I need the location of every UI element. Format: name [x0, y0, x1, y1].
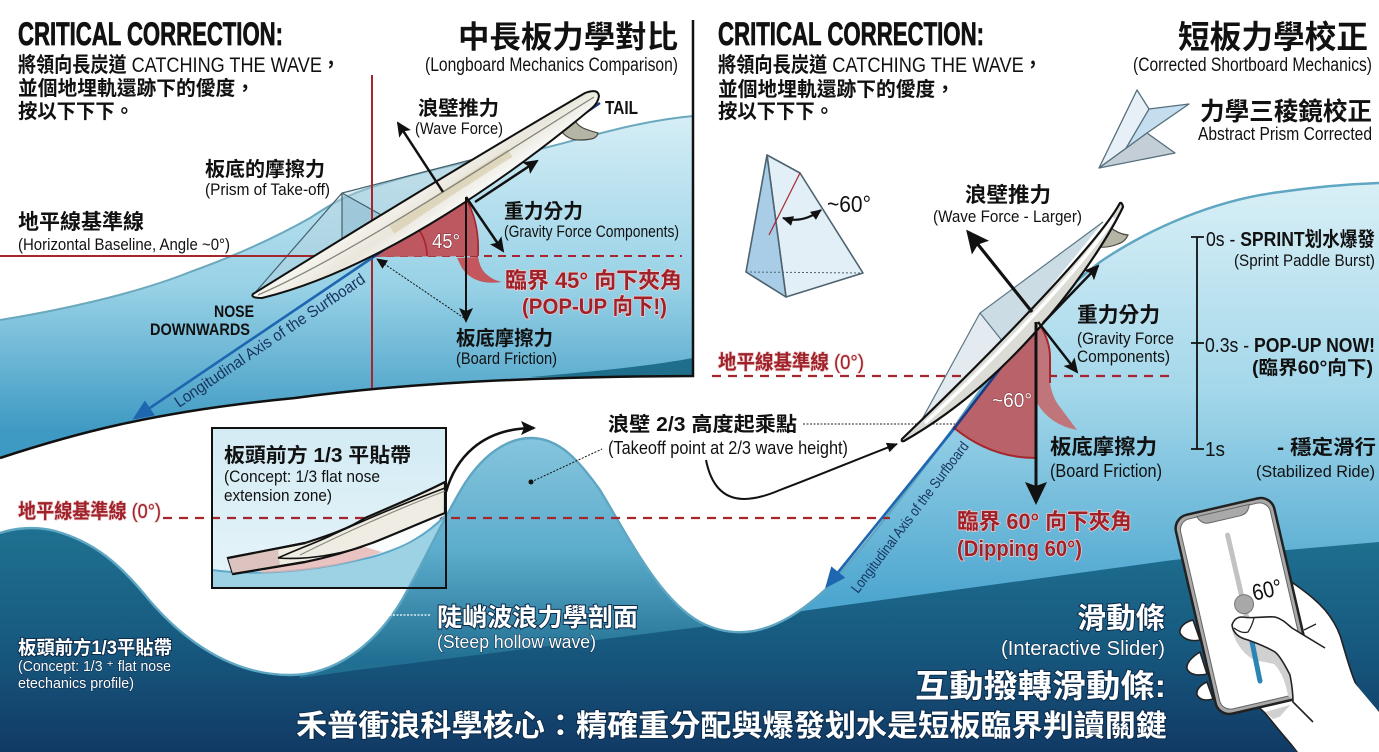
gravity label: 重力分力 — [1077, 304, 1160, 327]
critical angle callout — [505, 268, 682, 319]
takeoff label: (Takeoff point at 2/3 wave height) — [608, 438, 848, 458]
45 degree wedge — [372, 197, 502, 283]
panel: full wave profile — [0, 180, 1379, 752]
gravity label: 重力分力 — [504, 200, 583, 223]
chinese title: 短板力學校正 — [1178, 19, 1368, 55]
arrow: board friction — [465, 197, 467, 321]
1s entry: - 穩定滑行 — [1277, 435, 1376, 459]
lower left note: 板頭前方1/3平貼帶 — [18, 636, 172, 659]
baseline label: 地平線基準線 (0°) — [718, 351, 864, 374]
wave surface line — [0, 116, 693, 320]
prism label: (Prism of Take-off) — [205, 180, 330, 199]
deep water foreground — [0, 529, 1379, 752]
board friction label: (Board Friction) — [456, 349, 557, 368]
0.3s entry: (臨界60°向下) — [1252, 357, 1373, 379]
dashed baseline — [372, 255, 682, 257]
horizontal baseline label — [18, 211, 230, 254]
middle wave — [300, 439, 706, 678]
wave profile outline — [0, 183, 1379, 675]
1s entry — [1205, 435, 1376, 481]
longitudinal axis arrow — [135, 103, 600, 418]
board friction label — [1050, 435, 1162, 481]
icon: phone — [1173, 495, 1317, 717]
inset surfboard — [228, 482, 445, 574]
panel: longboard mechanics — [0, 20, 693, 458]
shortboard prism — [920, 222, 1103, 423]
panel: shortboard mechanics — [712, 203, 1170, 586]
timeline axis — [1191, 237, 1204, 449]
icon: shadow under thumb — [1232, 630, 1297, 719]
arrow: wave force — [398, 123, 443, 192]
board friction label — [456, 326, 557, 368]
slider track — [1228, 535, 1252, 641]
wave force label — [933, 184, 1082, 226]
take-off prism — [253, 157, 482, 295]
shortboard — [902, 203, 1123, 441]
critical angle callout: 臨界 45° 向下夾角 — [505, 268, 682, 293]
arrow: curved from inset to crest — [446, 428, 534, 492]
axis label: Longitudinal Axis of the Surfboard — [848, 439, 973, 596]
fin — [1100, 227, 1128, 247]
prism label: 板底的摩擦力 — [205, 157, 325, 181]
arrow: along board — [1043, 266, 1098, 323]
60 degree value: ~60° — [992, 390, 1032, 412]
inset panel background — [212, 428, 446, 588]
slider label: 滑動條 — [1077, 602, 1165, 635]
slider knob — [1233, 593, 1255, 616]
critical correction title: CRITICAL CORRECTION: — [18, 16, 283, 52]
prism label — [205, 157, 330, 199]
labels: shortboard — [718, 184, 1174, 596]
heading block: right correction — [718, 16, 1042, 123]
longboard wave water — [0, 116, 693, 458]
nose label: NOSE — [214, 302, 254, 321]
1s entry: 1s — [1205, 439, 1225, 461]
wave force label: (Wave Force) — [415, 119, 503, 138]
arrow: gravity component — [466, 197, 503, 251]
deep water corner — [530, 358, 693, 377]
prism legend: 力學三稜鏡校正 — [1200, 98, 1372, 126]
inset border — [212, 428, 446, 588]
60 degree label: ~60° — [827, 191, 871, 217]
note line 3: 按以下下下。 — [18, 100, 134, 123]
right wave — [800, 184, 1379, 612]
board friction label: 板底摩擦力 — [456, 326, 553, 350]
1s entry: (Stabilized Ride) — [1256, 462, 1375, 481]
interactive slider heading: 互動撥轉滑動條: — [915, 668, 1166, 704]
gravity label — [1077, 304, 1174, 366]
chinese title: 中長板力學對比 — [458, 20, 678, 55]
inset water curve — [212, 515, 446, 573]
note line 2: 並個地埋軌還跡下的僾度， — [18, 77, 255, 100]
takeoff label: 浪壁 2/3 高度起乘點 — [608, 412, 797, 436]
heading block: left correction — [18, 16, 340, 123]
tail label: TAIL — [605, 98, 638, 118]
steep wave label: 陡峭波浪力學剖面 — [437, 604, 638, 632]
slider value label: 60° — [1249, 574, 1284, 606]
english subtitle: (Longboard Mechanics Comparison) — [425, 55, 678, 76]
horizontal baseline label: (Horizontal Baseline, Angle ~0°) — [18, 235, 230, 254]
lower left note — [18, 636, 172, 692]
0.3s entry — [1205, 335, 1375, 379]
critical 60 callout — [957, 509, 1132, 561]
gravity label — [504, 200, 679, 241]
longboard — [252, 91, 599, 298]
note line 1: 將領向長炭道 CATCHING THE WAVE， — [718, 54, 1042, 77]
nose label — [150, 302, 254, 339]
0s entry — [1206, 228, 1375, 270]
timeline — [1191, 228, 1376, 481]
finger one — [1180, 620, 1200, 641]
palm — [1240, 583, 1379, 752]
white under-board gap — [362, 513, 445, 552]
critical angle callout: (POP-UP 向下!) — [522, 294, 667, 319]
60 degree wedge — [953, 322, 1077, 458]
steep wave label: (Steep hollow wave) — [437, 632, 596, 652]
board friction label: (Board Friction) — [1050, 461, 1162, 481]
lower baseline label: 地平線基準線 (0°) — [18, 500, 161, 523]
red vertical reference line — [371, 75, 373, 388]
arrow: gravity component — [1038, 322, 1077, 372]
slider value bar — [1252, 642, 1260, 681]
horizontal baseline — [0, 255, 330, 257]
critical 60 callout: 臨界 60° 向下夾角 — [957, 509, 1132, 534]
baseline dashed lower — [163, 517, 890, 519]
crest marker and leader — [528, 449, 602, 484]
axis label: Longitudinal Axis of the Surfboard — [172, 271, 369, 411]
inset heading: 板頭前方 1/3 平貼帶 — [224, 443, 411, 467]
wave force label: 浪壁推力 — [965, 184, 1051, 207]
inset description: (Concept: 1/3 flat nose — [224, 467, 380, 486]
arrow: board friction large — [1034, 322, 1038, 502]
prism legend — [1198, 98, 1372, 144]
arrow: wave force large — [968, 232, 1032, 312]
wave force label — [415, 96, 503, 138]
takeoff label — [608, 412, 955, 458]
gravity label: Components) — [1077, 347, 1170, 366]
wave force label: 浪壁推力 — [418, 96, 499, 120]
phone notch — [1197, 504, 1251, 525]
gravity label: (Gravity Force — [1077, 329, 1174, 348]
note line 3: 按以下下下。 — [718, 100, 834, 123]
finger three — [1197, 682, 1213, 700]
inset description: extension zone) — [224, 486, 332, 505]
wave lower edge — [0, 20, 693, 458]
lower left note: (Concept: 1/3 ⁺ flat nose — [18, 658, 171, 675]
finger two — [1187, 652, 1207, 675]
note line 2: 並個地埋軌還跡下的僾度， — [718, 78, 955, 101]
pink wedge — [260, 546, 382, 573]
axis arrow — [827, 322, 1036, 586]
inset water — [212, 515, 446, 588]
arrow: dotted pointer — [377, 259, 464, 318]
icon: 60 degree prism — [746, 155, 863, 297]
board friction label: 板底摩擦力 — [1050, 435, 1157, 459]
critical correction title: CRITICAL CORRECTION: — [718, 16, 984, 52]
arrow: takeoff curve — [706, 444, 897, 499]
main bottom title: 禾普衝浪科學核心：精確重分配與爆發划水是短板臨界判讀關鍵 — [296, 710, 1167, 743]
45 degree value: 45° — [432, 231, 460, 253]
slider label — [1001, 602, 1165, 660]
icon: abstract prism plane — [1099, 90, 1189, 168]
arrow: along board — [475, 161, 537, 202]
icon: thumb over phone — [1232, 617, 1379, 752]
wave force label: (Wave Force - Larger) — [933, 207, 1082, 226]
labels: longboard — [18, 96, 682, 411]
heading: longboard mechanics comparison — [425, 20, 678, 76]
steep wave label — [386, 604, 638, 652]
inset description — [224, 467, 380, 505]
lower left note: etechanics profile) — [18, 675, 134, 692]
shortboard baseline — [712, 375, 1170, 377]
icon: hand back and fingers — [1180, 583, 1379, 752]
heading: corrected shortboard mechanics — [1133, 19, 1372, 76]
nose label: DOWNWARDS — [150, 320, 250, 339]
horizontal baseline label: 地平線基準線 — [18, 211, 144, 234]
slider label: (Interactive Slider) — [1001, 638, 1165, 660]
note line 1: 將領向長炭道 CATCHING THE WAVE， — [18, 54, 340, 77]
critical 60 callout: (Dipping 60°) — [957, 536, 1082, 561]
gravity label: (Gravity Force Components) — [504, 222, 679, 241]
fin — [562, 120, 598, 140]
inset panel: flat nose zone — [212, 428, 446, 588]
